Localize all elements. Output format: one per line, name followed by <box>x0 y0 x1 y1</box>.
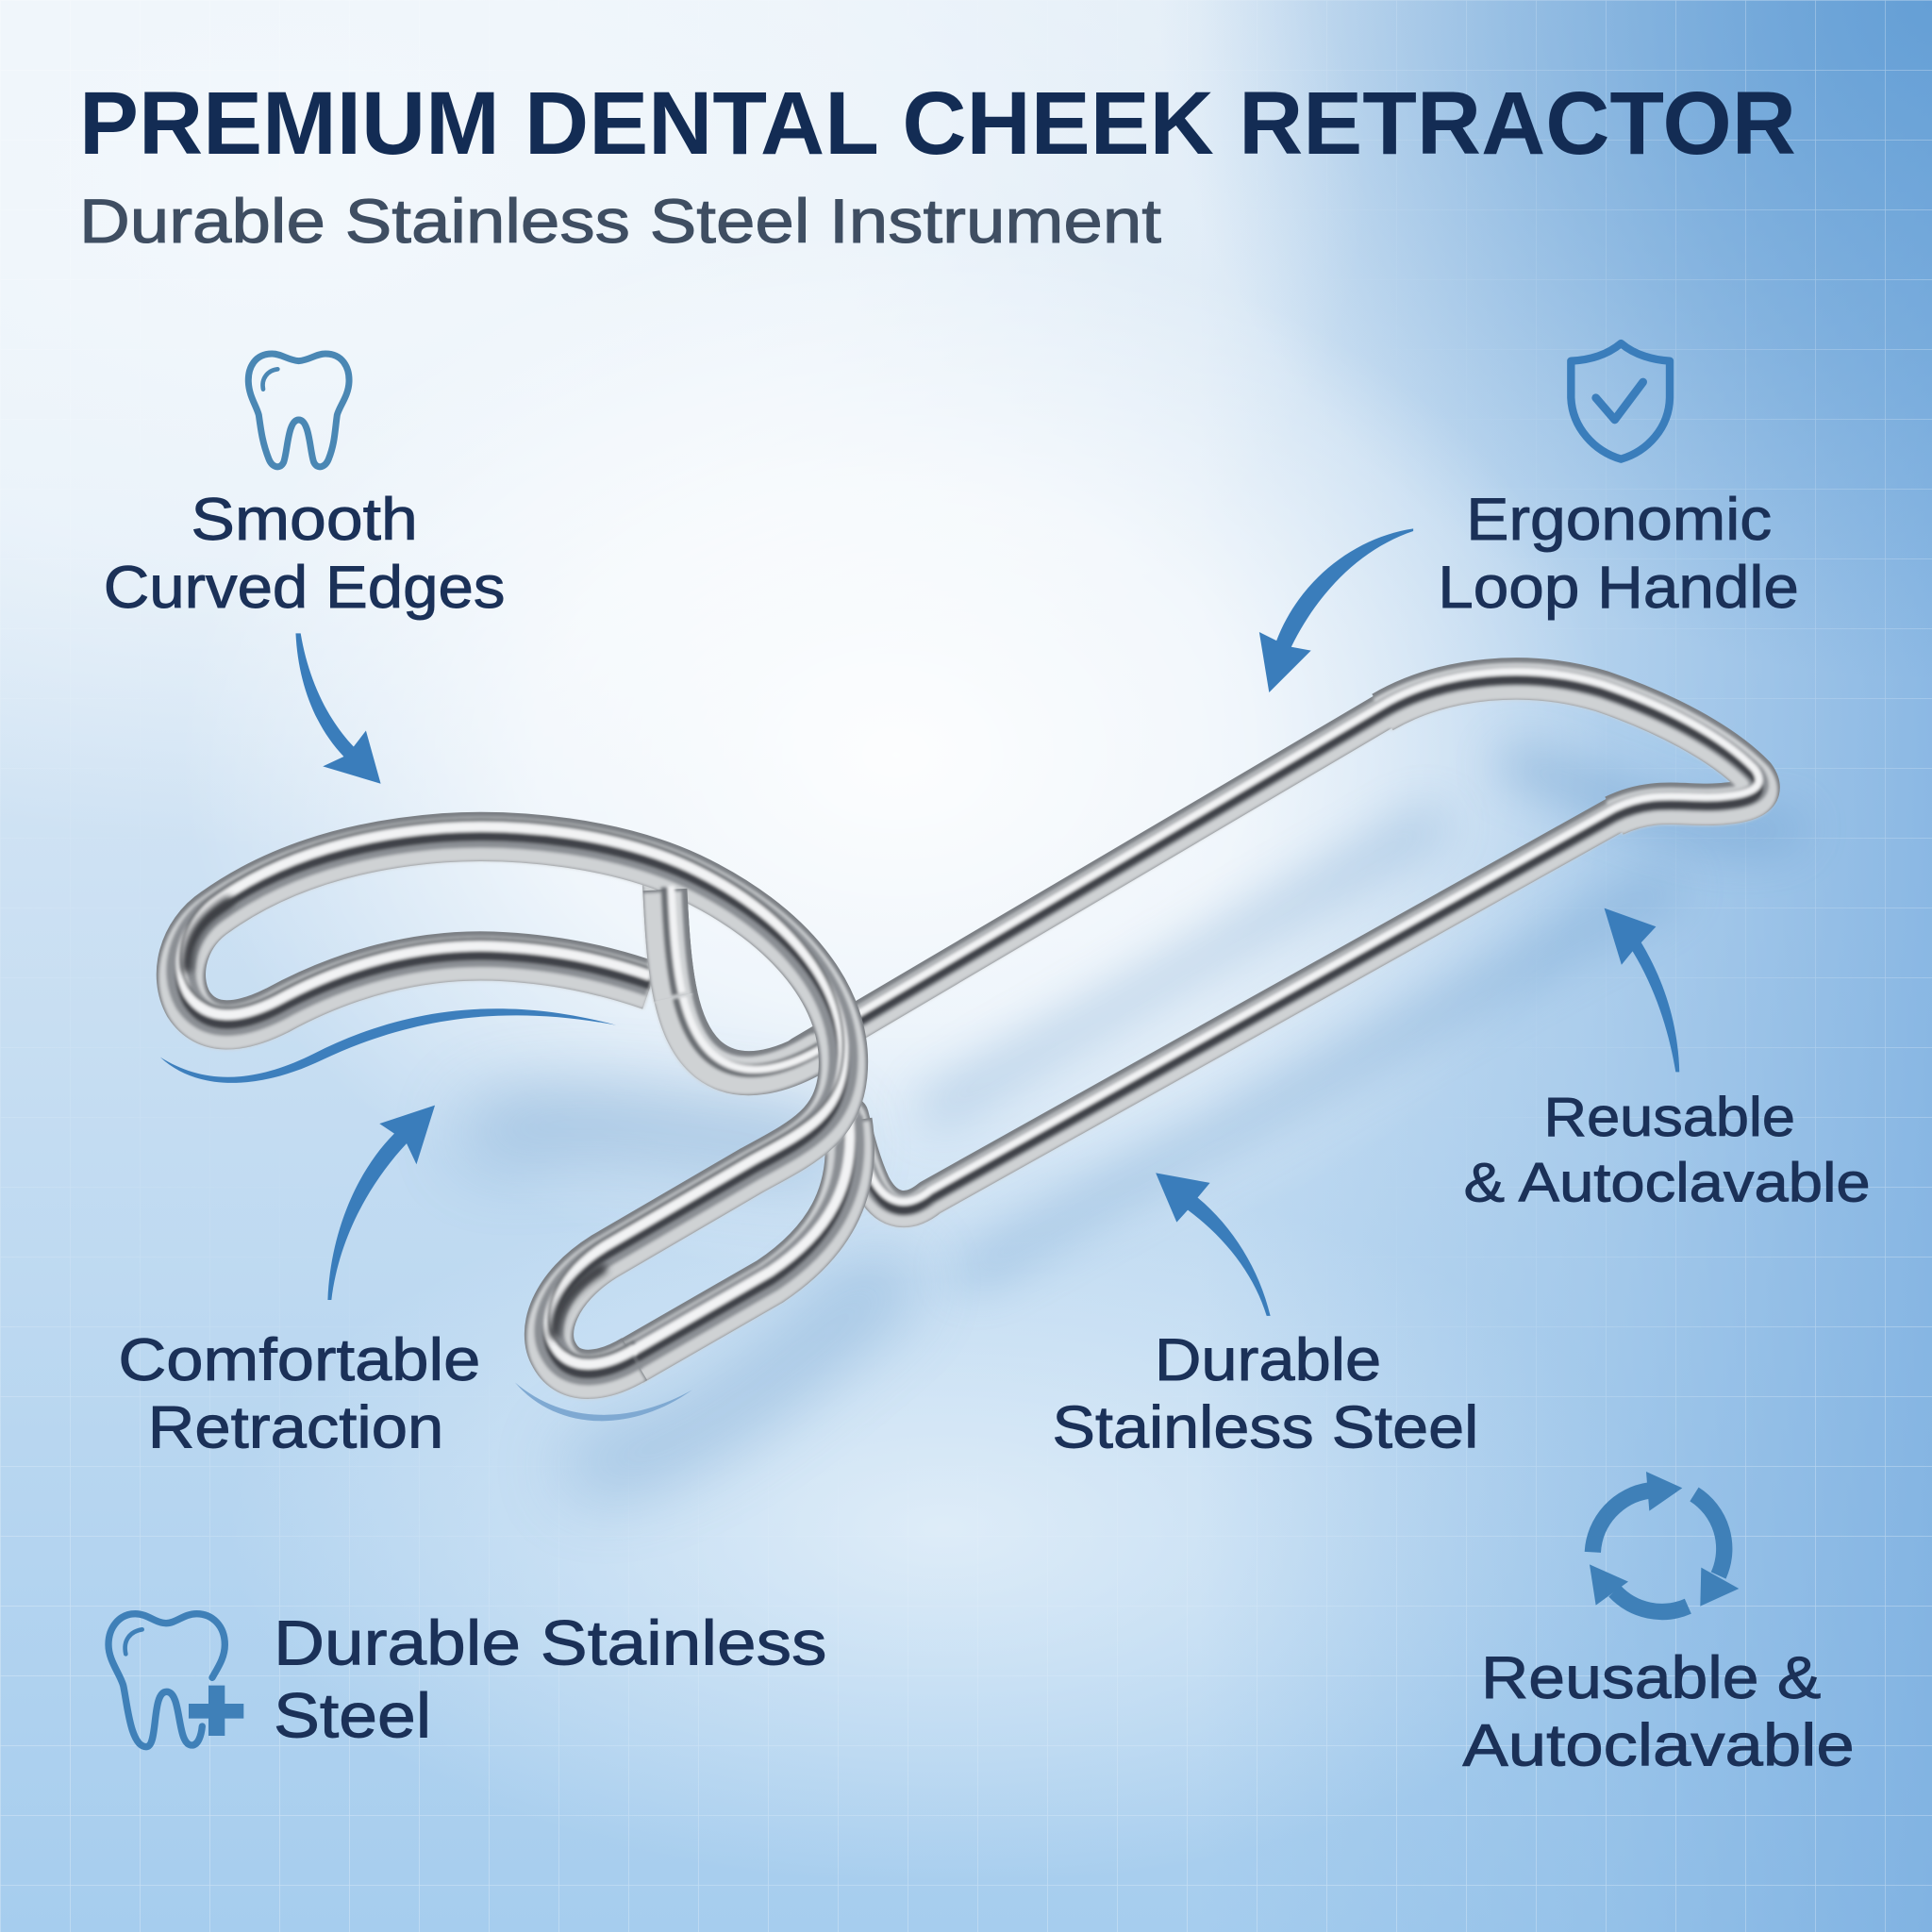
label: comfortable retraction: Comfortable <box>118 1327 480 1393</box>
label: reusable and autoclavable badge: Autoclavable <box>1462 1713 1855 1779</box>
label: reusable and autoclavable callout: & Autoclavable <box>1464 1152 1871 1213</box>
label: ergonomic loop handle: Ergonomic <box>1466 487 1772 553</box>
label: durable stainless steel badge <box>274 1609 826 1752</box>
retractor: handle loop <box>801 672 1759 1211</box>
label: smooth curved edges <box>104 487 506 621</box>
label: durable stainless steel callout <box>1052 1327 1478 1461</box>
label: reusable and autoclavable callout <box>1464 1087 1871 1213</box>
arrow: durable stainless steel <box>1156 1173 1271 1316</box>
arrow: ergonomic loop handle <box>1259 528 1413 692</box>
label: durable stainless steel badge: Steel <box>274 1682 431 1752</box>
label: ergonomic loop handle: Loop Handle <box>1438 555 1799 621</box>
retractor: lower loop return <box>631 1111 850 1364</box>
label: smooth curved edges: Curved Edges <box>104 555 506 621</box>
label: reusable and autoclavable badge <box>1462 1645 1855 1779</box>
icon: tooth <box>248 354 349 467</box>
title: PREMIUM DENTAL CHEEK RETRACTOR <box>79 74 1796 174</box>
label: durable stainless steel callout: Durable <box>1155 1327 1381 1393</box>
retractor: cheek wing and lower loop <box>181 820 843 1376</box>
product shadow <box>492 764 1787 1466</box>
arrow: smooth curved edges <box>295 633 381 784</box>
swoosh under wing <box>160 1008 616 1083</box>
label: durable stainless steel badge: Durable Stainless <box>274 1609 826 1679</box>
label: comfortable retraction <box>118 1327 480 1461</box>
arrow: reusable and autoclavable <box>1605 908 1679 1072</box>
retractor: tip reflections <box>188 902 601 1333</box>
icon: recycle arrows <box>1590 1472 1739 1611</box>
subtitle: Durable Stainless Steel Instrument <box>79 186 1161 256</box>
retractor: strut junction <box>662 886 682 999</box>
label: reusable and autoclavable badge: Reusable & <box>1481 1645 1821 1711</box>
label: ergonomic loop handle <box>1438 487 1799 621</box>
icon: tooth with plus <box>108 1614 243 1747</box>
label: reusable and autoclavable callout: Reusable <box>1544 1087 1795 1148</box>
label: smooth curved edges: Smooth <box>191 487 418 553</box>
label: comfortable retraction: Retraction <box>148 1395 443 1461</box>
retractor: strut <box>661 874 825 1075</box>
icon: shield check <box>1571 343 1670 459</box>
arrow: comfortable retraction <box>327 1106 435 1300</box>
swoosh under loop <box>515 1382 692 1421</box>
label: durable stainless steel callout: Stainless Steel <box>1052 1395 1478 1461</box>
